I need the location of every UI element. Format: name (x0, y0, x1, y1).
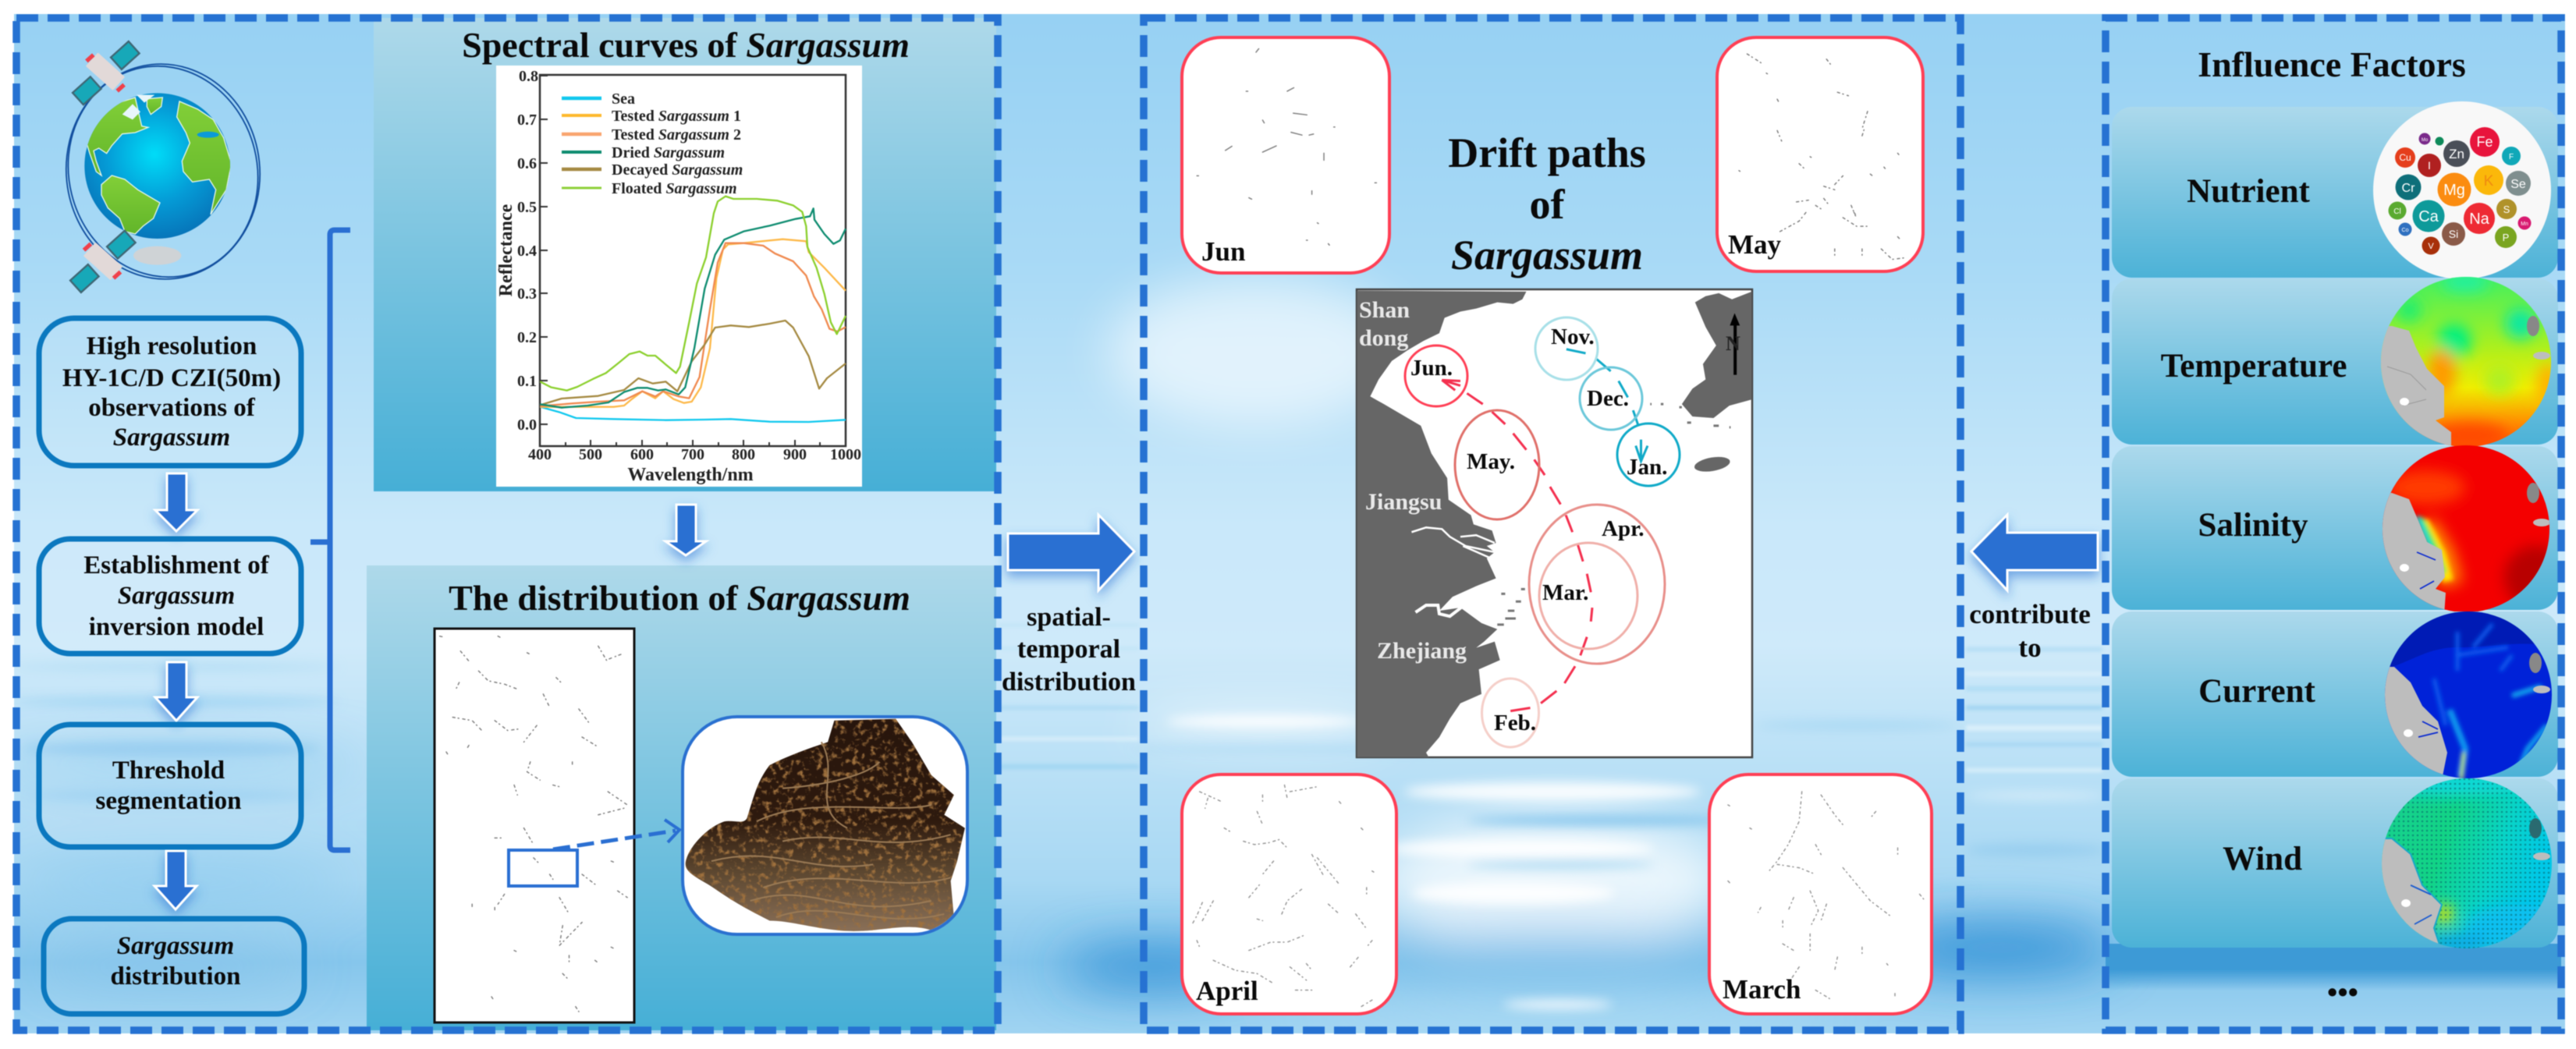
province labels: dong (1359, 325, 1408, 351)
icon: nutrient bubbles: F (2509, 153, 2514, 161)
arrow: spectral to distribution (665, 505, 706, 555)
label: contribute to: contribute (1969, 599, 2091, 629)
province labels: Jiangsu (1365, 489, 1442, 515)
icon: nutrient bubbles: Cl (2393, 207, 2401, 216)
arrow: flow step 2 (155, 662, 197, 721)
label: spatial-temporal distribution: distribution (1002, 668, 1136, 696)
flow box: distribution: Sargassum (117, 932, 234, 960)
flow box: inversion model (39, 539, 301, 654)
heading: Influence Factors: Influence Factors (2198, 44, 2466, 84)
row: Nutrient (2112, 101, 2558, 279)
icon: nutrient bubbles: Ca (2418, 208, 2439, 225)
month labels: Jan. (1627, 455, 1667, 480)
arrow: flow step 1 (155, 473, 197, 531)
chart: spectral reflectance curves: 600 (630, 446, 654, 463)
flow box: distribution: distribution (111, 962, 240, 991)
flow box: threshold segmentation: Threshold (112, 757, 225, 785)
panel: May image: May (1728, 229, 1782, 260)
row: Wind (2112, 771, 2574, 953)
month labels: Feb. (1494, 711, 1536, 735)
arrow: flow step 3 (154, 851, 197, 909)
chart: spectral reflectance curves: 0.8 (519, 68, 538, 85)
legend: Sea (612, 90, 635, 108)
icon: nutrient bubbles: S (2503, 204, 2510, 215)
chart: spectral reflectance curves: 1000 (830, 446, 861, 463)
icon: nutrient bubbles: I (2428, 159, 2431, 172)
icon: nutrient bubbles: Mg (2443, 182, 2465, 199)
province labels: Zhejiang (1377, 638, 1467, 664)
chart: current map (2384, 611, 2553, 779)
flow box: inversion model: inversion model (89, 613, 264, 641)
chart: spectral reflectance curves (496, 66, 862, 487)
row: Wind: Wind (2223, 841, 2302, 877)
icon: north arrow (1730, 314, 1740, 375)
flow box: observations: Sargassum (113, 423, 230, 452)
flow box: inversion model: Sargassum (118, 582, 235, 610)
label: contribute to: to (2018, 633, 2042, 663)
month labels: May. (1467, 449, 1515, 474)
icon: nutrient bubbles: V (2428, 242, 2434, 251)
curves (540, 197, 846, 422)
dashed frame: centre panel (1144, 18, 1960, 1030)
province labels (1359, 297, 1467, 664)
panel: May image (1717, 37, 1923, 271)
flow box: observations: observations of (88, 394, 256, 422)
arrow: contribute to (1971, 515, 2098, 590)
chart: spectral reflectance curves: 0.6 (517, 155, 537, 172)
drift route: teal (1567, 349, 1648, 461)
chart: spectral reflectance curves: Reflectance (496, 204, 516, 296)
panel: Jun image (1182, 37, 1389, 273)
map: drift path: N (1726, 332, 1740, 355)
chart: spectral reflectance curves: 0.2 (517, 329, 537, 346)
chart: spectral reflectance curves: 800 (732, 446, 755, 463)
icon: nutrient bubbles: Zn (2449, 147, 2464, 161)
row: Current: Current (2198, 673, 2316, 710)
month labels: Mar. (1542, 580, 1588, 605)
label: spatial-temporal distribution: spatial- (1027, 603, 1111, 632)
panel: March image: March (1723, 974, 1801, 1005)
label: contribute to (1969, 599, 2091, 663)
map image: Sargassum distribution (435, 629, 634, 1022)
flow box: observations (39, 318, 301, 466)
icon: nutrient bubbles: Si (2449, 228, 2458, 240)
chart: spectral reflectance curves: Wavelength/nm (627, 465, 754, 485)
flow box: distribution (44, 919, 304, 1014)
icon: nutrient bubbles: Se (2510, 178, 2526, 191)
month labels: Apr. (1602, 516, 1645, 541)
dashed frame: right panel (2106, 18, 2561, 1030)
zoom rectangle (509, 850, 577, 886)
map: drift path (1357, 289, 1752, 757)
chart: spectral reflectance curves: 400 (528, 446, 552, 463)
chart: spectral reflectance curves: 0.7 (517, 112, 537, 129)
chart: spectral reflectance curves: 0.4 (517, 243, 537, 260)
row: Current (2112, 608, 2559, 780)
icon: nutrient bubbles: Fe (2476, 134, 2493, 150)
legend: Tested Sargassum 2 (612, 126, 741, 144)
label: spatial-temporal distribution: temporal (1017, 635, 1120, 664)
chart: spectral reflectance curves: 700 (681, 446, 704, 463)
legend: Tested Sargassum 1 (612, 108, 741, 125)
panel: March image (1709, 774, 1932, 1014)
chart: spectral reflectance curves: 500 (579, 446, 602, 463)
panel: April image (1182, 774, 1396, 1014)
chart: spectral reflectance curves: 0.0 (517, 416, 537, 434)
row: Temperature: Temperature (2161, 348, 2347, 385)
panel: April image: April (1196, 976, 1258, 1006)
panel: Jun image: Jun (1201, 236, 1245, 267)
icon: nutrient bubbles: Cu (2399, 152, 2411, 163)
heading: Drift paths of Sargassum: Sargassum (1451, 232, 1643, 278)
month labels: Jun. (1410, 356, 1453, 381)
legend (562, 90, 743, 197)
band below factor rows (2106, 944, 2561, 991)
row: Salinity (2112, 445, 2567, 615)
heading: Drift paths of Sargassum (1448, 129, 1646, 278)
heading: Drift paths of Sargassum: Drift paths (1448, 129, 1646, 176)
label: spatial-temporal distribution (1002, 603, 1136, 696)
icon: nutrient bubbles: Cr (2402, 182, 2415, 195)
chart: spectral reflectance curves: 0.5 (517, 199, 537, 216)
chart: temperature map (2381, 276, 2552, 447)
legend: Dried Sargassum (612, 144, 725, 161)
chart: spectral reflectance curves: 900 (783, 446, 807, 463)
month labels (1410, 324, 1667, 735)
icon: nutrient bubbles: Co (2402, 228, 2409, 233)
chart: salinity map (2383, 445, 2550, 612)
photo: Sargassum sample (683, 717, 967, 934)
flow box: threshold segmentation (39, 725, 301, 847)
panel: spectral curves background (374, 18, 996, 491)
dashed frame: left panel (16, 18, 998, 1030)
heading: Drift paths of Sargassum: of (1530, 181, 1566, 228)
legend: Decayed Sargassum (612, 161, 743, 179)
drift route: red (1442, 380, 1592, 711)
icon: nutrient bubbles (2373, 101, 2551, 279)
panel: distribution background (367, 565, 996, 1030)
flow box: threshold segmentation: segmentation (96, 787, 241, 815)
flow box: observations: High resolution (87, 332, 257, 360)
row: Nutrient: Nutrient (2187, 173, 2310, 210)
icon: nutrient bubbles: Mo (2422, 138, 2429, 143)
month labels: Nov. (1551, 324, 1595, 349)
icon: nutrient bubbles: Na (2469, 211, 2490, 228)
arrow: to spatial-temporal distribution (1008, 515, 1134, 590)
ellipsis: more factors: ••• (2327, 976, 2358, 1009)
arrow: dashed zoom arrow (553, 820, 679, 849)
chart: spectral reflectance curves: 0.1 (517, 373, 537, 390)
heading: spectral curves: Spectral curves of Sargassum (462, 25, 910, 65)
month ellipses (1405, 317, 1680, 747)
month labels: Dec. (1587, 386, 1629, 411)
row: Temperature (2112, 273, 2559, 448)
chart: wind map (2381, 778, 2553, 948)
flow box: observations: HY-1C/D CZI(50m) (62, 364, 281, 392)
icon: satellite globe (65, 40, 261, 294)
icon: nutrient bubbles: Mn (2521, 221, 2528, 227)
heading: distribution of Sargassum: The distribution of Sargassum (449, 578, 910, 618)
chart: spectral reflectance curves: 0.3 (517, 285, 537, 303)
row: Salinity: Salinity (2198, 507, 2308, 544)
province labels: Shan (1359, 297, 1410, 323)
legend: Floated Sargassum (612, 180, 737, 197)
flow box: inversion model: Establishment of (83, 551, 270, 579)
bracket (310, 230, 350, 850)
icon: nutrient bubbles: P (2503, 232, 2509, 243)
icon: nutrient bubbles: K (2484, 173, 2494, 190)
